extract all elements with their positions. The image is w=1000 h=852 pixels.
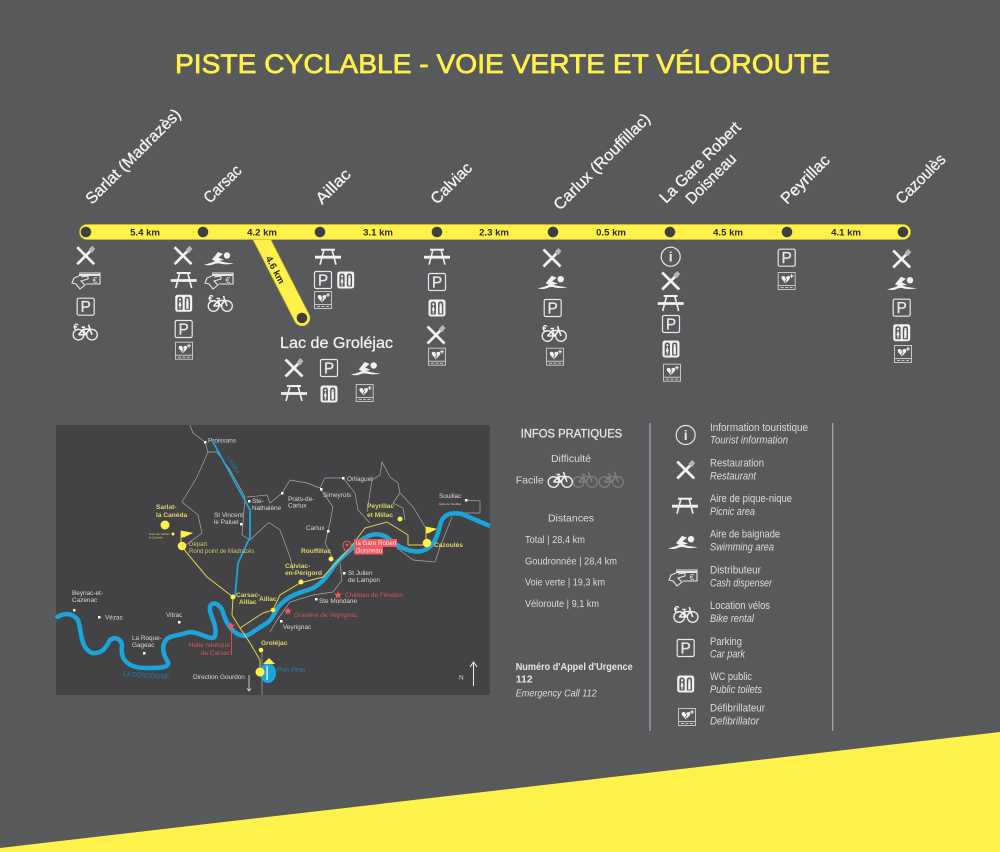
stop names: Aillac	[313, 166, 355, 208]
legend: restaurant: Restaurant	[710, 470, 757, 482]
legend: bike rental	[674, 600, 771, 625]
route dots	[160, 516, 431, 676]
services: Aillac: P	[318, 272, 328, 290]
branch to Lac de Groléjac: 4.6 km	[263, 254, 286, 286]
river labels: LA DORDOGNE	[123, 671, 170, 681]
place names: Vézac	[105, 614, 124, 622]
legend: bike rental: Location vélos	[710, 600, 771, 612]
legend: tourist information	[676, 422, 808, 447]
legend: restaurant: Restauration	[710, 457, 764, 469]
place names: Gare de Souillac	[439, 502, 462, 506]
distance labels: 4.1 km	[831, 228, 861, 238]
route stop names on map: Gare de Sarlat-	[149, 532, 170, 536]
legend: public toilets: Public toilets	[710, 684, 763, 696]
stop names	[83, 106, 949, 214]
emergency number: Numéro d'Appel d'Urgence	[516, 661, 633, 673]
place names: Beynac-et-	[72, 590, 103, 597]
river labels	[123, 456, 305, 681]
route stop names on map: Peyrillac	[367, 503, 394, 510]
legend: parking	[677, 636, 746, 661]
distance labels	[130, 228, 861, 238]
services: Sarlat: €	[73, 323, 79, 334]
yellow corner band	[0, 732, 1000, 852]
river: Dordogne	[56, 513, 490, 668]
legend: parking: Car park	[710, 649, 746, 661]
place names: Simeyrols	[323, 492, 351, 499]
distance labels: 2.3 km	[479, 228, 509, 238]
Lac de Groléjac label: Lac de Groléjac	[280, 335, 393, 352]
route stop names on map: Rond point de Madrazès	[189, 549, 254, 555]
legend: tourist information: Tourist information	[710, 435, 788, 447]
place names: St Julien	[348, 570, 373, 577]
distance labels: 0.5 km	[596, 228, 626, 238]
legend: picnic area: Picnic area	[710, 506, 755, 518]
place names: Ste-	[252, 498, 264, 505]
place names: Direction Gourdon	[193, 674, 245, 681]
place names: Prats-de-	[288, 496, 314, 503]
distances: Total | 28,4 km	[525, 534, 585, 546]
panel: map	[56, 425, 490, 695]
route stop names on map: Calviac-	[285, 563, 310, 570]
distances: Distances	[548, 512, 594, 524]
north arrow	[459, 662, 477, 686]
legend: cash dispenser: Cash dispenser	[710, 577, 772, 589]
points of interest: de Carsac	[201, 650, 231, 657]
route stop names on map: Rouffillac	[301, 548, 331, 555]
stop names: Sarlat (Madrazès)	[83, 106, 185, 208]
route stop names on map: la Canéda	[149, 536, 163, 540]
route stop names on map: Départ	[189, 542, 207, 548]
place names: Gageac	[132, 642, 155, 649]
services: Calviac: P	[432, 274, 442, 292]
river: Vézère	[213, 442, 250, 597]
route timeline	[80, 224, 910, 323]
services: Carsac: P	[179, 322, 189, 338]
services: Cazoulès	[887, 249, 917, 362]
place names: Souillac	[439, 493, 462, 500]
services: Sarlat: P	[81, 299, 91, 316]
legend: defibrillator: Defibrillator	[710, 715, 759, 727]
place names: Ste Mondane	[319, 598, 357, 605]
place names: Proissans	[208, 438, 236, 444]
legend: cash dispenser: €	[690, 572, 695, 582]
marker: La Gare Robert Doisneau	[343, 539, 397, 554]
points of interest: Halte nautique	[189, 642, 230, 649]
services: Aillac	[314, 250, 354, 308]
main yellow line	[80, 224, 910, 240]
services: Carlux: P	[548, 300, 558, 318]
distances: Goudronnée | 28,4 km	[525, 555, 617, 567]
lake	[260, 658, 276, 683]
place names: La Roque-	[132, 635, 162, 642]
stop names: La Gare Robert	[657, 119, 745, 207]
route stop names on map: et Millac	[367, 512, 393, 519]
emergency number: Emergency Call 112	[516, 688, 597, 700]
legend: swimming area: Aire de baignade	[710, 529, 780, 541]
stop names: Calviac	[428, 160, 476, 208]
legend: restaurant	[677, 457, 764, 482]
place names: Cazenac	[72, 597, 98, 604]
stop markers	[81, 227, 908, 237]
difficulty	[516, 453, 623, 487]
services: Carsac: €	[208, 294, 214, 305]
place names: le Paluel	[214, 519, 239, 526]
points of interest: Château de Fénelon	[345, 592, 403, 599]
north arrow: N	[459, 674, 464, 682]
legend: defibrillator: Défibrillateur	[710, 703, 765, 715]
services: Carsac	[171, 246, 234, 359]
place names: Carlux	[288, 502, 307, 510]
route stop names on map: Aillac	[259, 596, 277, 603]
place names	[72, 438, 462, 681]
services: La Gare Robert Doisneau: P	[666, 316, 676, 334]
place names: Veyrignac	[283, 624, 312, 631]
route stop names on map: Carsac-	[236, 592, 260, 599]
place names: St Vincent	[214, 512, 243, 519]
legend: parking: Parking	[710, 636, 742, 648]
services: Peyrillac: P	[782, 250, 792, 267]
river labels: Plan d'eau	[277, 668, 305, 674]
stop names: Carlux (Rouffillac)	[551, 111, 654, 214]
services: Carsac: €	[226, 275, 231, 285]
emergency number: 112	[516, 674, 533, 686]
difficulty: Difficulté	[551, 453, 591, 465]
direction arrow	[247, 675, 251, 691]
river labels: L'ENÉA	[225, 456, 241, 476]
flags	[181, 527, 436, 546]
marker: La Gare Robert Doisneau: la Gare Robert	[356, 540, 397, 547]
marker: La Gare Robert Doisneau: Doisneau	[356, 548, 383, 554]
legend: bike rental: Bike rental	[710, 613, 755, 625]
route stop names on map	[149, 503, 463, 647]
distance labels: 4.2 km	[247, 228, 277, 238]
route stop names on map: Sarlat-	[156, 504, 177, 511]
heading: INFOS PRATIQUES	[521, 429, 623, 441]
route stop names on map: en-Périgord	[285, 570, 322, 577]
legend: tourist information: i	[684, 427, 688, 443]
legend: tourist information: Information touristique	[710, 422, 808, 434]
place markers	[73, 441, 468, 654]
place names: Orliaguet	[347, 476, 373, 483]
distances: Voie verte | 19,3 km	[525, 577, 605, 589]
points of interest: Gravière de Veyrignac	[294, 612, 358, 619]
title: PISTE CYCLABLE - VOIE VERTE ET VÉLOROUTE	[175, 49, 830, 79]
services: Sarlat: €	[93, 275, 98, 285]
legend: picnic area: Aire de pique-nique	[710, 493, 792, 505]
branch to Lac de Groléjac	[260, 236, 307, 323]
services: Lac de Groléjac	[280, 335, 393, 402]
legend: parking: P	[681, 640, 691, 658]
emergency number	[516, 661, 633, 700]
legend: cash dispenser	[669, 564, 772, 589]
services: Lac de Groléjac: P	[324, 360, 334, 378]
distance labels: 5.4 km	[130, 228, 160, 238]
distance labels: 4.5 km	[713, 228, 743, 238]
route stop names on map: Cazoulès	[434, 542, 463, 549]
difficulty: Facile	[516, 474, 544, 486]
points of interest	[189, 591, 403, 657]
distances: Véloroute | 9,1 km	[525, 598, 599, 610]
legend: picnic area	[672, 493, 792, 518]
services: La Gare Robert Doisneau: i	[669, 249, 673, 265]
services: Calviac	[424, 250, 450, 365]
legend: defibrillator	[678, 703, 765, 727]
services: Peyrillac	[778, 249, 795, 290]
distance labels: 3.1 km	[363, 228, 393, 238]
services: Carlux: €	[542, 324, 548, 335]
legend: public toilets	[677, 671, 763, 696]
services: Cazoulès: P	[897, 300, 907, 317]
panel: infos pratiques	[516, 429, 633, 700]
place names: de Lampon	[348, 577, 380, 584]
place names: Vitrac	[166, 612, 183, 619]
stop names: Doisneau	[683, 151, 740, 208]
route stop names on map: Aillac	[239, 599, 257, 606]
legend: swimming area: Swimming area	[710, 542, 774, 554]
stop names: Cazoulès	[893, 151, 949, 208]
stop names: Peyrillac	[778, 152, 834, 208]
panel: legend	[650, 422, 833, 731]
cycle route	[182, 522, 427, 672]
legend: public toilets: WC public	[710, 671, 753, 683]
route stop names on map: Groléjac	[261, 640, 288, 647]
stop names: Carsac	[201, 162, 245, 207]
legend: cash dispenser: Distributeur	[710, 564, 761, 576]
services: La Gare Robert Doisneau	[658, 247, 684, 381]
services: Carlux	[538, 248, 568, 365]
distances	[525, 512, 617, 610]
route stop names on map: la Canéda	[156, 512, 187, 519]
legend: swimming area	[668, 529, 780, 554]
legend: bike rental: €	[674, 605, 680, 616]
place names: Carlux	[306, 525, 325, 532]
place names: Nathalène	[252, 505, 282, 512]
services: Sarlat	[72, 246, 100, 340]
